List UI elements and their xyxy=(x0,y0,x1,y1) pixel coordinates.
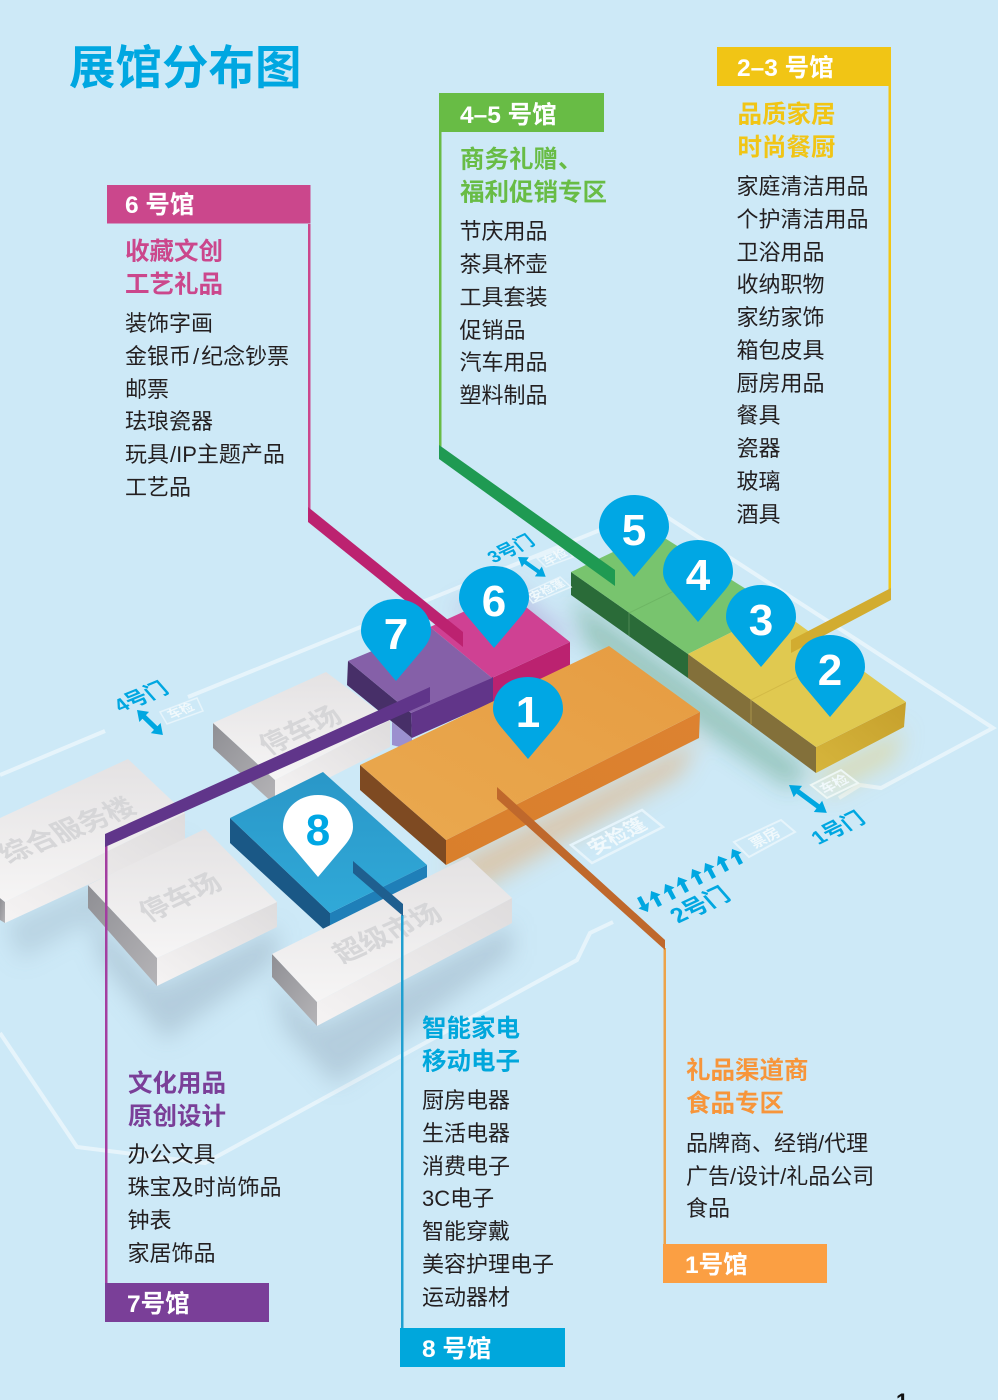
panel: hall 8: 智能家电 xyxy=(422,1014,520,1042)
pin 4 xyxy=(663,540,733,622)
panel: halls 2-3: 玻璃 xyxy=(736,469,781,494)
pin 3 xyxy=(726,585,796,667)
gate 4 label and arrow xyxy=(109,679,174,740)
panel: hall 6: 收藏文创 xyxy=(125,238,223,266)
panel: hall 1: 广告/设计/礼品公司 xyxy=(686,1164,874,1189)
ground label: vehicle check gate 4: 车检 xyxy=(164,700,198,721)
panel: halls 2-3: 收纳职物 xyxy=(736,272,825,297)
panel: hall 7: 7号馆 xyxy=(127,1290,190,1318)
panel: hall 1 xyxy=(663,1056,874,1283)
panel: halls 2-3: 个护清洁用品 xyxy=(736,207,869,232)
panel: halls 4-5: 商务礼赠、 xyxy=(460,146,582,174)
panel: halls 2-3: 家庭清洁用品 xyxy=(736,174,869,199)
pin 2 xyxy=(795,635,865,717)
ground label: vehicle check gate 1: 车检 xyxy=(816,772,852,796)
panel: hall 6 xyxy=(107,185,310,500)
panel: hall 6: 工艺礼品 xyxy=(125,270,223,298)
ground label: main security tent: 安检篷 xyxy=(582,813,652,859)
pin 7: 7 xyxy=(384,610,408,659)
panel: halls 4-5: 汽车用品 xyxy=(460,350,548,375)
panel: hall 7: 家居饰品 xyxy=(128,1241,216,1266)
panel: hall 1: 礼品渠道商 xyxy=(686,1056,808,1084)
panel: hall 7: 文化用品 xyxy=(128,1070,226,1098)
panel: halls 2-3: 家纺家饰 xyxy=(736,305,825,330)
pin 7 xyxy=(361,599,431,681)
pin 8: 8 xyxy=(306,806,330,855)
pin 4: 4 xyxy=(686,551,711,600)
building: parking lot north xyxy=(213,672,390,805)
pin 1: 1 xyxy=(516,688,540,737)
panel: hall 6: 装饰字画 xyxy=(125,311,213,336)
gate 3 label and arrow xyxy=(482,531,549,582)
hall 7 lavender reflection xyxy=(392,722,412,750)
panel: hall 6: 6 号馆 xyxy=(125,191,194,219)
ground label: ticket office: 票房 xyxy=(746,824,784,852)
panel: hall 6: 金银币/纪念钞票 xyxy=(125,344,289,369)
ground label: vehicle check gate 3: 车检 xyxy=(539,546,570,568)
panel: hall 8: 美容护理电子 xyxy=(422,1252,554,1277)
gate 1 label and arrow: 1号门 xyxy=(807,808,870,849)
pin 3: 3 xyxy=(749,596,773,645)
panel: halls 4-5: 福利促销专区 xyxy=(460,178,607,206)
pin 1 xyxy=(493,677,563,759)
panel: hall 8: 运动器材 xyxy=(422,1285,510,1310)
panel: halls 4-5: 塑料制品 xyxy=(460,383,548,408)
gate 2 label and arrows: 2号门 xyxy=(664,883,736,927)
connector: hall 8 xyxy=(353,861,404,1329)
panel: hall 1: 品牌商、经销/代理 xyxy=(686,1131,868,1156)
gate 3 label and arrow: 3号门 xyxy=(482,531,539,566)
panel: halls 2-3: 卫浴用品 xyxy=(736,240,825,265)
panel: halls 2-3: 时尚餐厨 xyxy=(738,134,836,162)
panel: hall 6: 玩具/IP主题产品 xyxy=(125,442,285,467)
panel: halls 2-3: 瓷器 xyxy=(736,436,781,461)
panel: hall 7: 原创设计 xyxy=(128,1102,226,1130)
panel: hall 7: 钟表 xyxy=(128,1208,172,1233)
panel: hall 8: 厨房电器 xyxy=(422,1088,510,1113)
connector: hall 1 xyxy=(497,787,666,1245)
panel: hall 8: 生活电器 xyxy=(422,1121,510,1146)
ground label: ticket office xyxy=(734,820,795,857)
building: parking lot south: 停车场 xyxy=(132,868,228,927)
panel: halls 4-5: 工具套装 xyxy=(460,285,548,310)
title: 展馆分布图 xyxy=(69,42,302,94)
halls 4-5 block xyxy=(571,532,778,678)
connector: halls 2-3 xyxy=(791,85,891,653)
panel: hall 8 xyxy=(400,1014,565,1367)
hall 7 block xyxy=(347,627,493,738)
panel: hall 6: 珐琅瓷器 xyxy=(125,409,213,434)
pin 5 xyxy=(599,495,669,577)
panel: hall 8: 3C电子 xyxy=(422,1186,494,1211)
pin 2: 2 xyxy=(818,646,842,695)
panel: hall 8: 移动电子 xyxy=(422,1048,520,1076)
building: parking lot north: 停车场 xyxy=(252,701,348,760)
panel: halls 2-3: 2–3 号馆 xyxy=(737,54,834,82)
pin 8 xyxy=(283,795,353,877)
panel: hall 7 xyxy=(105,1070,282,1322)
pin 6 xyxy=(459,566,529,648)
panel: halls 2-3: 餐具 xyxy=(736,403,781,428)
connector: halls 4-5 xyxy=(439,132,615,586)
panel: halls 2-3: 品质家居 xyxy=(738,100,836,128)
hall 6 block xyxy=(430,592,570,702)
panel: hall 1: 食品专区 xyxy=(686,1090,784,1118)
building: supermarket xyxy=(272,857,512,1026)
block shadows xyxy=(5,585,904,1085)
panel: halls 4-5: 节庆用品 xyxy=(460,219,548,244)
ground label: vehicle check gate 4 xyxy=(160,698,203,724)
panel: halls 4-5 xyxy=(439,93,607,408)
panel: halls 4-5: 4–5 号馆 xyxy=(460,101,557,129)
site boundary lines xyxy=(0,517,993,1163)
pin 5: 5 xyxy=(622,506,646,555)
panel: hall 1: 1号馆 xyxy=(685,1251,748,1279)
connector: hall 7 xyxy=(105,687,430,1284)
panel: halls 2-3: 酒具 xyxy=(736,502,781,527)
panel: halls 2-3: 箱包皮具 xyxy=(736,338,825,363)
gate 1 label and arrow xyxy=(785,779,870,849)
gate 4 label and arrow: 4号门 xyxy=(109,679,174,716)
building: supermarket: 超级市场 xyxy=(326,899,449,968)
connector: hall 6 xyxy=(308,224,463,647)
panel: halls 2-3 xyxy=(717,47,891,527)
building: parking lot south xyxy=(88,829,277,986)
panel: halls 4-5: 茶具杯壶 xyxy=(460,252,548,277)
building: general service building xyxy=(0,759,185,923)
panel: hall 8: 8 号馆 xyxy=(422,1335,491,1363)
panel: hall 1: 食品 xyxy=(686,1196,730,1221)
ground label: main security tent xyxy=(571,810,663,863)
ground label: security tent gate 3: 安检篷 xyxy=(526,576,568,604)
panel: hall 8: 智能穿戴 xyxy=(422,1219,510,1244)
panel: hall 6: 邮票 xyxy=(125,377,169,402)
panel: hall 6: 工艺品 xyxy=(125,475,191,500)
ground label: vehicle check gate 1 xyxy=(811,770,858,798)
panel: halls 4-5: 促销品 xyxy=(460,318,526,343)
halls 2-3 block xyxy=(688,609,906,773)
hall 8 block xyxy=(230,772,427,935)
panel: hall 8: 消费电子 xyxy=(422,1154,510,1179)
panel: hall 7: 办公文具 xyxy=(128,1142,216,1167)
panel: hall 7: 珠宝及时尚饰品 xyxy=(128,1175,282,1200)
pin 6: 6 xyxy=(482,577,506,626)
hall 1 block xyxy=(360,646,700,865)
gate 2 label and arrows xyxy=(637,849,743,927)
panel: halls 2-3: 厨房用品 xyxy=(736,371,825,396)
